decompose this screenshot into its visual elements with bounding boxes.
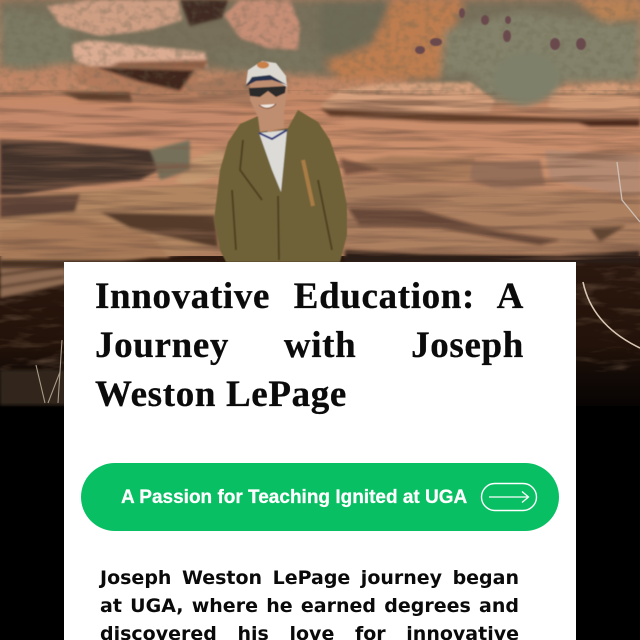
title: [95, 276, 524, 415]
cave texture: [0, 262, 640, 372]
layered mid-right ledges: [0, 82, 640, 256]
dark rock ledge on the left: [0, 140, 168, 195]
sunglasses: [249, 86, 286, 97]
jacket folds and straps: [232, 140, 332, 260]
dry grass lower left: [36, 340, 62, 403]
green pill banner: [81, 463, 559, 531]
title: Journey with Joseph: [95, 325, 524, 366]
white content card: [64, 262, 576, 640]
cap: [246, 61, 287, 87]
white shirt: [259, 130, 287, 192]
branch upper right: [617, 162, 640, 222]
dark lower cave area: [0, 256, 640, 406]
cactus pads: [415, 8, 586, 54]
rock face base: [0, 0, 640, 270]
icon: arrow in rounded outline: [480, 482, 538, 512]
dry branch at right: [583, 282, 640, 348]
body text: Joseph Weston LePage journey began: [100, 567, 519, 589]
body text: [98, 567, 519, 640]
vegetation texture: [0, 0, 640, 95]
top boulders: [47, 0, 300, 106]
rock strata texture: [0, 90, 640, 260]
man: [214, 61, 347, 262]
upper hillside and vegetation: [0, 0, 640, 106]
body text: at UGA, where he earned degrees and: [100, 595, 519, 617]
title: Innovative Education: A: [95, 276, 524, 317]
lower-left rock and ground: [0, 262, 66, 405]
fleece jacket: [214, 110, 347, 262]
blue collar: [259, 130, 287, 139]
neck and face: [250, 78, 288, 132]
tan ledge and lower-left rocks: [0, 140, 224, 262]
bush: [495, 53, 559, 103]
cap logo: [257, 62, 269, 68]
banner label: A Passion for Teaching Ignited at UGA: [121, 487, 467, 508]
dark crevices in the right rock: [0, 158, 640, 268]
background photo: man standing in front of red sandstone rocks: [0, 0, 640, 406]
title: Weston LePage: [95, 374, 347, 415]
smile: [259, 104, 276, 108]
cap brim: [246, 75, 287, 86]
